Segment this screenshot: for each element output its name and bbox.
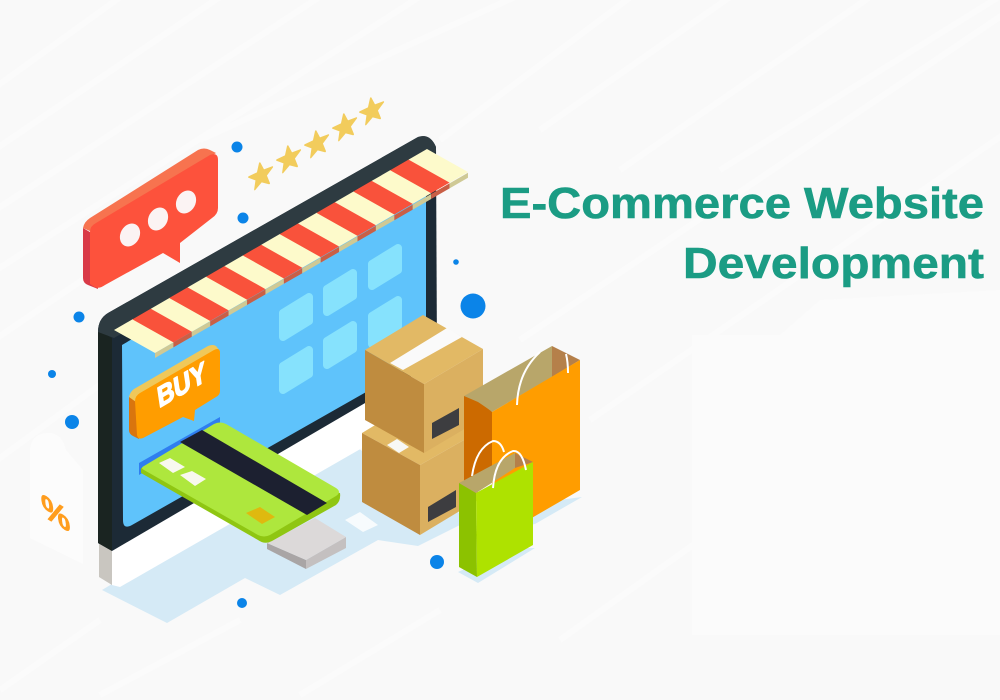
bubble top (83, 148, 216, 232)
lower box label (428, 490, 456, 522)
buy bubble top (129, 345, 220, 402)
bubble face (90, 154, 218, 288)
buy bubble side (129, 397, 139, 439)
card reader slab (267, 518, 346, 569)
awning front edge (155, 173, 468, 358)
floor shadow (102, 440, 582, 623)
green bag back handle (472, 441, 504, 476)
awning stripes (114, 149, 468, 353)
awning (114, 149, 468, 358)
upper box tape (390, 328, 462, 370)
lower cardboard box (362, 398, 478, 535)
card squares (159, 458, 206, 486)
floor highlight (345, 512, 378, 532)
title (500, 179, 984, 288)
green bag front (476, 462, 533, 577)
card edge (141, 468, 340, 543)
buy label: BUY (155, 355, 208, 414)
orange bag front (492, 360, 580, 541)
green bag inner (459, 453, 515, 493)
orange bag inner (464, 346, 552, 412)
card slot (139, 417, 220, 475)
upper box label (432, 408, 459, 439)
card chip (246, 507, 275, 524)
magnetic stripe (180, 430, 327, 515)
chat bubble (83, 148, 218, 289)
upper cardboard box (365, 315, 483, 453)
orange bag gusset (464, 396, 492, 482)
bubble side (83, 228, 98, 289)
app tiles (283, 248, 398, 390)
monitor top bezel (98, 136, 436, 338)
monitor frame (98, 136, 437, 551)
screen (122, 165, 426, 527)
title line 1: E-Commerce Website (500, 179, 984, 228)
orange shopping bag (464, 346, 580, 541)
percent symbol: % (39, 486, 72, 541)
orange bag handles (517, 352, 568, 405)
rating stars (248, 93, 385, 191)
lower box tape (387, 439, 409, 453)
credit card (141, 422, 340, 543)
green shopping bag (459, 441, 533, 577)
title line 2: Development (683, 239, 984, 288)
decorative blue dots (48, 142, 486, 608)
tag with percent sign (30, 433, 83, 564)
green bag gusset (459, 483, 477, 577)
card face (142, 422, 339, 536)
buy speech bubble (129, 345, 220, 439)
monitor left edge (98, 330, 112, 551)
monitor silver edge (99, 543, 112, 585)
buy bubble face (135, 349, 220, 439)
bubble dots (116, 187, 200, 250)
monitor chin (112, 361, 437, 587)
monitor (98, 136, 437, 587)
green bag front handle (493, 451, 526, 488)
